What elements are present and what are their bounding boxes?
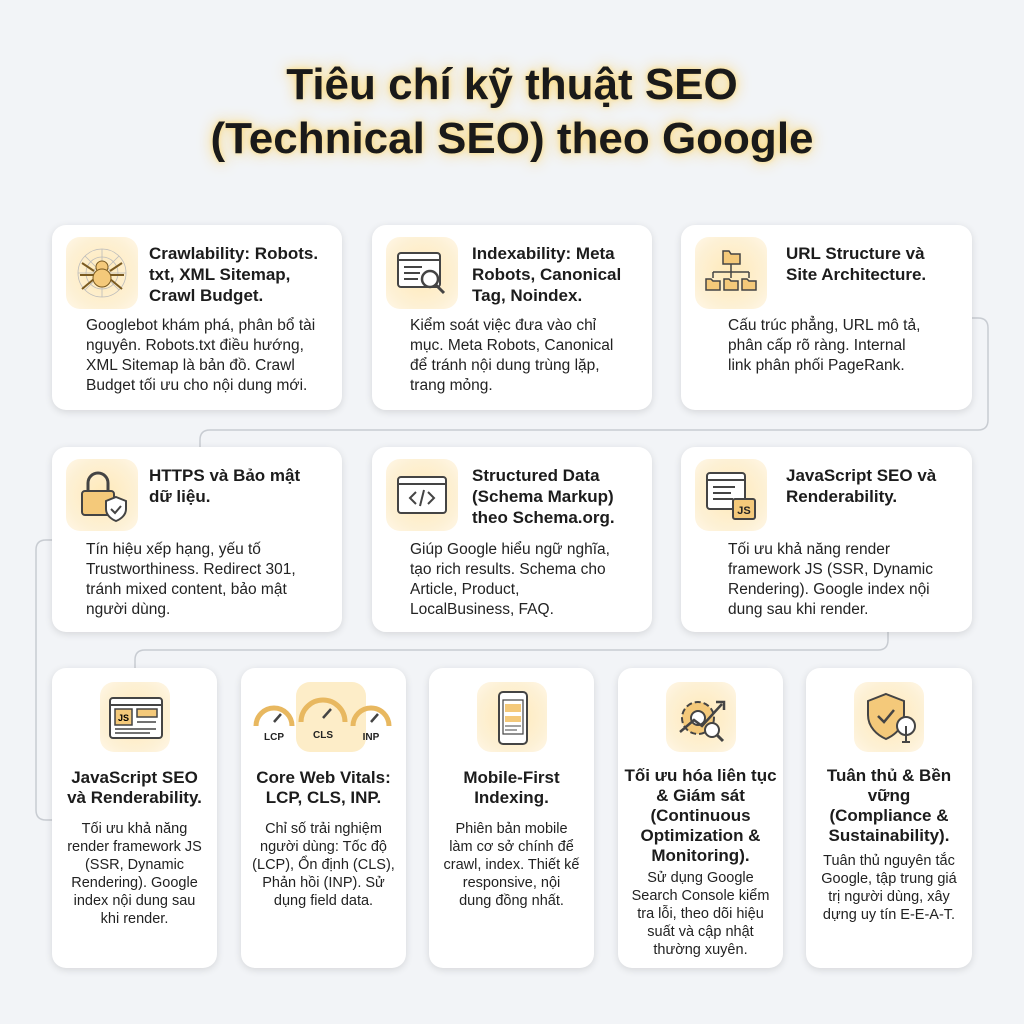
text — [632, 870, 769, 958]
heading: (Continuous — [650, 806, 751, 825]
icon: folders — [695, 237, 767, 309]
icon: phone — [477, 682, 547, 752]
text: dựng uy tín E-E-A-T. — [823, 907, 955, 923]
text: Rendering). Google index nội — [728, 581, 930, 598]
text: Giúp Google hiểu ngữ nghĩa, — [410, 541, 610, 558]
text — [444, 821, 580, 909]
text: làm cơ sở chính để — [449, 839, 574, 855]
heading: dữ liệu. — [149, 487, 210, 506]
text: mục. Meta Robots, Canonical — [410, 337, 613, 354]
icon: gauges: LCP — [264, 732, 284, 743]
heading: Robots, Canonical — [472, 265, 621, 284]
heading — [472, 466, 615, 527]
panel: URL structure — [681, 225, 972, 410]
text: Googlebot khám phá, phân bổ tài — [86, 317, 315, 334]
heading: URL Structure và — [786, 244, 925, 263]
text: (LCP), Ổn định (CLS), — [252, 857, 395, 873]
icon: lock shield — [66, 459, 138, 531]
text: Tuân thủ nguyên tắc — [823, 853, 955, 869]
text — [410, 317, 613, 394]
text: framework JS (SSR, Dynamic — [728, 561, 933, 578]
icon: shield tree — [854, 682, 924, 752]
text — [728, 541, 933, 618]
icon: gauges: CLS — [313, 730, 333, 741]
panel: crawlability — [52, 225, 342, 410]
icon: browser search — [386, 237, 458, 309]
text: (SSR, Dynamic — [85, 857, 184, 873]
text: render framework JS — [67, 839, 202, 855]
text: phân cấp rõ ràng. Internal — [728, 337, 906, 354]
text: dụng field data. — [274, 893, 373, 909]
heading — [786, 244, 926, 284]
panel: HTTPS — [52, 447, 342, 632]
heading: Monitoring). — [651, 846, 750, 865]
text: link phân phối PageRank. — [728, 357, 905, 374]
text: Rendering). Google — [71, 875, 198, 891]
text: crawl, index. Thiết kế — [444, 857, 579, 873]
heading: Renderability. — [786, 487, 897, 506]
icon: JS file — [695, 459, 767, 531]
text: Tối ưu khả năng render — [728, 541, 890, 558]
text — [252, 821, 395, 909]
text: tra lỗi, theo dõi hiệu — [637, 906, 764, 922]
text: XML Sitemap là bản đồ. Crawl — [86, 357, 295, 374]
icon: gauges — [254, 682, 392, 752]
text: LocalBusiness, FAQ. — [410, 601, 554, 618]
heading: (Schema Markup) — [472, 487, 614, 506]
text: trị người dùng, xây — [828, 889, 950, 905]
panel: structured data — [372, 447, 652, 632]
icon: JS browser: JS — [118, 713, 129, 723]
panel: indexability — [372, 225, 652, 410]
heading — [67, 768, 202, 807]
heading: Mobile-First — [463, 768, 560, 787]
title: (Technical SEO) theo Google — [210, 114, 814, 163]
heading — [463, 768, 560, 807]
icon: code window — [386, 459, 458, 531]
heading: Crawl Budget. — [149, 286, 263, 305]
heading — [827, 766, 951, 845]
panel: JavaScript SEO — [681, 447, 972, 632]
heading: Indexability: Meta — [472, 244, 615, 263]
text: responsive, nội — [463, 875, 560, 891]
heading — [472, 244, 621, 305]
text: suất và cập nhật — [647, 924, 754, 940]
text: người dùng: Tốc độ — [260, 839, 387, 855]
icon: JS file: JS — [737, 505, 751, 517]
text: Cấu trúc phẳng, URL mô tả, — [728, 317, 920, 334]
text: Search Console kiểm — [632, 888, 769, 904]
heading: Tuân thủ & Bền — [827, 766, 951, 785]
title: Tiêu chí kỹ thuật SEO — [286, 60, 738, 109]
heading: theo Schema.org. — [472, 508, 615, 527]
heading — [624, 766, 777, 865]
heading: Core Web Vitals: — [256, 768, 391, 787]
heading — [149, 466, 300, 506]
heading — [786, 466, 936, 506]
text — [86, 541, 296, 618]
text: người dùng. — [86, 601, 170, 618]
text: Sử dụng Google — [647, 870, 754, 886]
heading: Tag, Noindex. — [472, 286, 582, 305]
heading: Tối ưu hóa liên tục — [624, 766, 777, 785]
heading: và Renderability. — [67, 788, 202, 807]
text: Google, tập trung giá — [821, 871, 957, 887]
heading: Sustainability). — [829, 826, 949, 845]
panel: compliance — [806, 668, 972, 968]
heading: JavaScript SEO — [71, 768, 198, 787]
heading — [256, 768, 391, 807]
heading: Crawlability: Robots. — [149, 244, 318, 263]
icon: spider — [66, 237, 138, 309]
heading: JavaScript SEO và — [786, 466, 936, 485]
text: thường xuyên. — [653, 942, 748, 958]
heading: LCP, CLS, INP. — [266, 788, 381, 807]
icon: gauges: INP — [363, 732, 380, 743]
text: nguyên. Robots.txt điều hướng, — [86, 337, 304, 354]
text: Tín hiệu xếp hạng, yếu tố — [86, 541, 261, 558]
title — [202, 58, 820, 171]
text — [821, 852, 957, 923]
text: tạo rich results. Schema cho — [410, 561, 606, 578]
text: Phản hồi (INP). Sử — [262, 875, 385, 891]
text: dung sau khi render. — [728, 601, 868, 618]
panel: continuous optimization — [618, 668, 783, 968]
panel: core web vitals — [241, 668, 406, 968]
heading — [149, 244, 318, 305]
text: dung đồng nhất. — [459, 893, 564, 909]
text: Budget tối ưu cho nội dung mới. — [86, 377, 307, 394]
text: Chỉ số trải nghiệm — [265, 821, 382, 837]
text: để tránh nội dung trùng lặp, — [410, 357, 600, 374]
heading: HTTPS và Bảo mật — [149, 466, 300, 485]
heading: Indexing. — [474, 788, 549, 807]
text: trang mỏng. — [410, 377, 493, 394]
text: index nội dung sau — [74, 893, 195, 909]
text — [410, 541, 610, 618]
heading: Structured Data — [472, 466, 600, 485]
panel: mobile-first — [429, 668, 594, 968]
text: Phiên bản mobile — [455, 821, 568, 837]
panel: JavaScript SEO row3 — [52, 668, 217, 968]
text — [67, 821, 202, 927]
heading: txt, XML Sitemap, — [149, 265, 290, 284]
heading: & Giám sát — [656, 786, 745, 805]
text: tránh mixed content, bảo mật — [86, 581, 287, 598]
text: Trustworthiness. Redirect 301, — [86, 561, 296, 578]
text — [86, 317, 315, 394]
heading: vững — [868, 786, 910, 805]
icon: JS browser — [100, 682, 170, 752]
icon: gear chart — [666, 682, 736, 752]
text: Article, Product, — [410, 581, 519, 598]
text: khi render. — [101, 911, 168, 927]
text — [728, 316, 920, 374]
heading: Optimization & — [641, 826, 760, 845]
heading: (Compliance & — [829, 806, 949, 825]
heading: Site Architecture. — [786, 265, 926, 284]
text: Kiểm soát việc đưa vào chỉ — [410, 317, 596, 334]
text: Tối ưu khả năng — [82, 821, 187, 837]
